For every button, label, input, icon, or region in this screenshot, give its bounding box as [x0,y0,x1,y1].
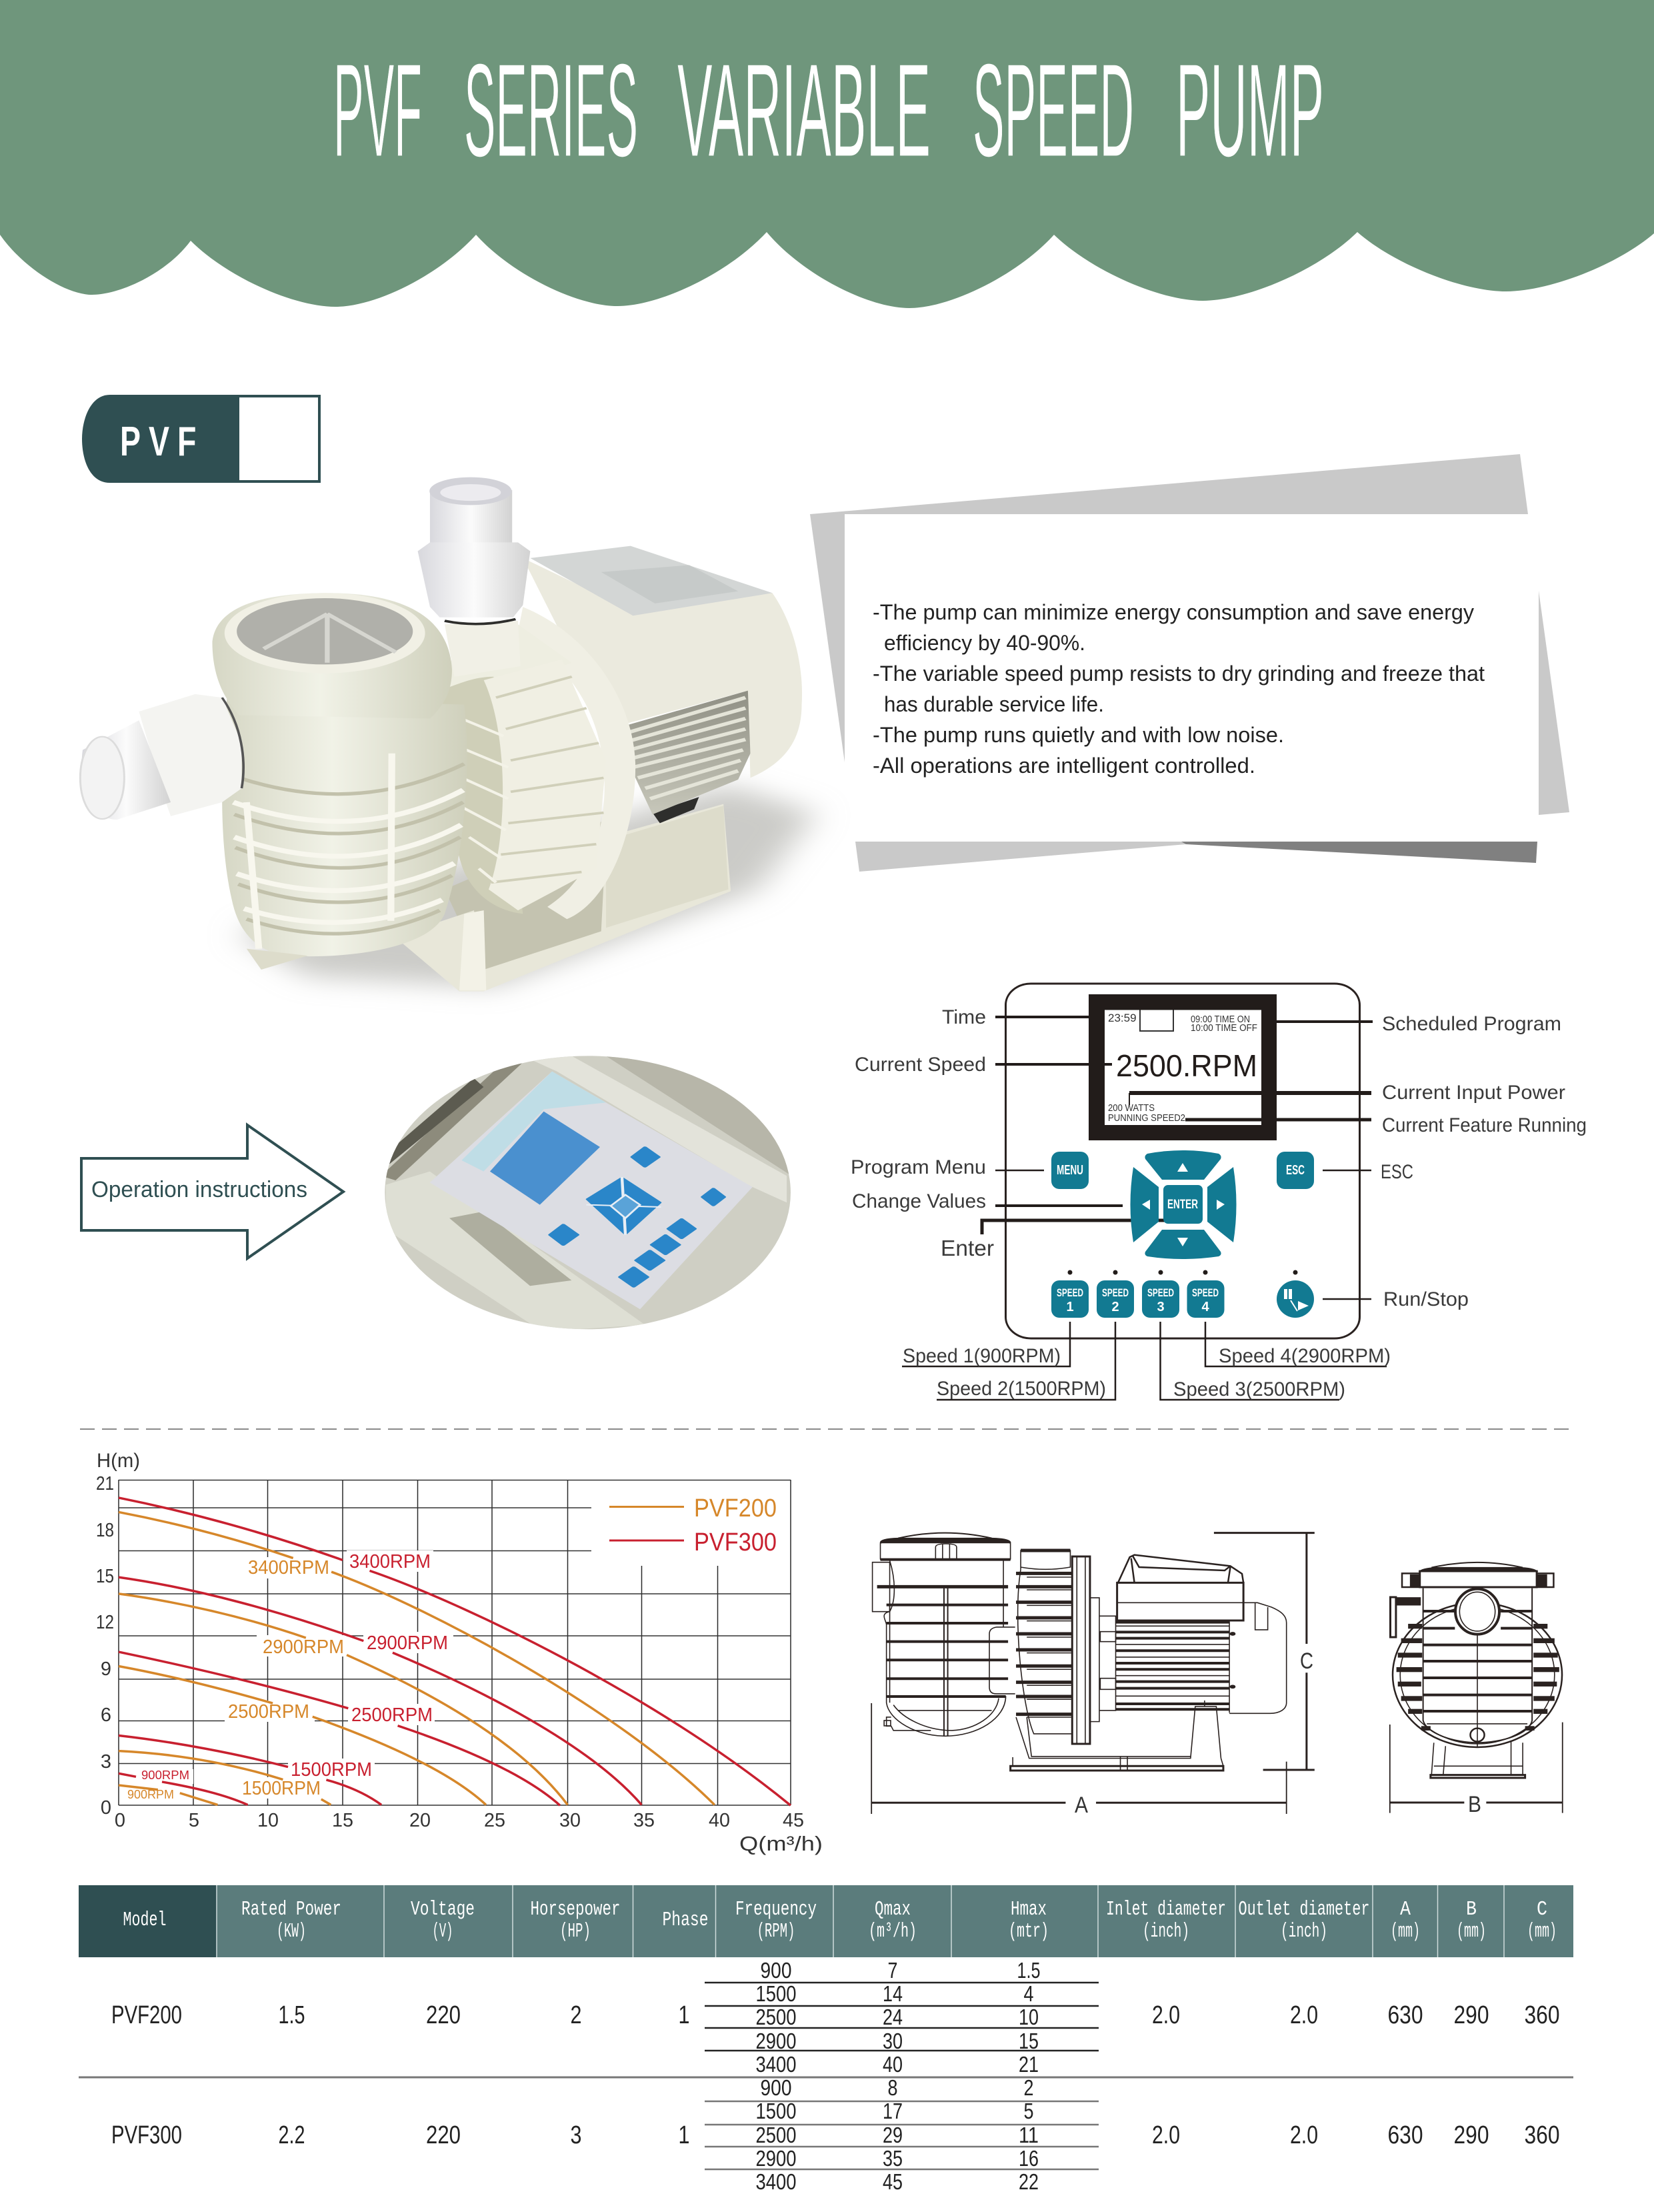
chart axes: 20 [409,1810,431,1831]
row: PVF300: 900 [760,2075,792,2100]
chart axes: 30 [559,1810,581,1831]
table header: Outlet diameter [1239,1898,1369,1921]
row: PVF300: 630 [1388,2121,1423,2149]
row: PVF300: 2500 [756,2123,796,2147]
curve labels: 2500RPM [351,1705,433,1726]
table header: Horsepower [531,1898,620,1921]
row: PVF200: 40 [883,2052,903,2077]
chart axes: 5 [189,1810,199,1831]
dimension labels: A [1075,1793,1088,1818]
callout labels: ESC [1381,1161,1413,1183]
row: PVF200: 7 [888,1958,897,1983]
performance chart: 1500RPM [242,1778,321,1799]
dimension labels: C [1300,1648,1313,1674]
operation instructions arrow: Operation instructions [91,1177,307,1202]
callout labels: Current Input Power [1382,1082,1565,1104]
dimension labels: B [1468,1792,1481,1817]
table header: C [1537,1898,1547,1921]
row: PVF300: 2.0 [1152,2121,1180,2149]
control panel photo [381,1054,797,1332]
row: PVF200: 630 [1388,2001,1423,2029]
curve labels: 3400RPM [349,1551,431,1572]
panel: feature description: efficiency by 40-90%. [884,631,1085,655]
speed buttons: 4 [1201,1300,1209,1314]
speed buttons: 2 [1111,1300,1119,1314]
callout labels: Current Speed [855,1054,986,1076]
row: PVF200: 14 [883,1981,903,2006]
chart axes: 21 [96,1473,114,1494]
row: PVF200: 220 [426,2001,461,2029]
LCD display: 09:00 TIME ON [1191,1014,1250,1025]
chart axes: 0 [101,1797,111,1819]
row: PVF300 [111,2075,1560,2194]
performance curves [119,1498,791,1805]
table header [79,1885,1573,1957]
control panel diagram [851,984,1587,1400]
chart axes: 40 [709,1810,730,1831]
callout labels: Change Values [852,1190,986,1212]
panel: feature description: has durable service life. [884,692,1104,716]
table header: Model [123,1909,167,1932]
title: SPEED [973,37,1134,185]
curve labels: 1500RPM [291,1759,372,1781]
row: PVF200: 2.0 [1290,2001,1318,2029]
pump photo illustration [80,477,817,991]
row: PVF300: 360 [1524,2121,1560,2149]
panel: feature description: -The pump runs quietly and with low noise. [873,723,1284,747]
speed buttons: SPEED [1192,1286,1219,1299]
menu and esc buttons [1051,1152,1314,1189]
row: PVF200: 4 [1024,1981,1033,2006]
speed buttons: 3 [1157,1300,1165,1314]
row: PVF300: 3 [571,2121,581,2149]
chart axes: 15 [96,1566,114,1587]
row: PVF200: 2 [571,2001,581,2029]
row: PVF300: 5 [1024,2099,1033,2123]
run stop button [1277,1280,1314,1318]
row: PVF200: 21 [1019,2052,1039,2077]
table header: Rated Power [241,1898,341,1921]
callout lines [902,1017,1387,1400]
performance chart: 2900RPM [263,1636,344,1658]
table row lines [79,1983,1573,2169]
panel: feature description: -The variable speed pump resists to dry grinding and freeze that [873,662,1485,686]
row: PVF300: 3400 [756,2169,796,2194]
table header: Frequency [735,1898,817,1921]
chart grid [119,1480,791,1805]
callout labels: Scheduled Program [1382,1013,1561,1035]
title [333,37,1324,185]
row: PVF200: 30 [883,2029,903,2053]
table header: Qmax [875,1898,911,1921]
table header: (V) [432,1920,453,1943]
speed buttons: SPEED [1147,1286,1174,1299]
row: PVF300: 220 [426,2121,461,2149]
callout labels: Program Menu [851,1156,986,1178]
LCD display: 23:59 [1108,1012,1137,1024]
panel: feature description: -All operations are intelligent controlled. [873,754,1255,778]
menu and esc buttons: ESC [1286,1163,1305,1178]
row: PVF200: 2.0 [1152,2001,1180,2029]
row: PVF300: 35 [883,2146,903,2171]
table header: (KW) [277,1920,306,1943]
table header: B [1466,1898,1477,1921]
callout labels: Speed 1(900RPM) [903,1345,1061,1367]
row: PVF300: 8 [888,2075,897,2100]
table header: Hmax [1011,1898,1047,1921]
row: PVF200: 900 [760,1958,792,1983]
performance chart: 3400RPM [248,1557,329,1578]
row: PVF200: 3400 [756,2052,796,2077]
curve labels: 2900RPM [367,1632,448,1654]
row: PVF300: 2.0 [1290,2121,1318,2149]
row: PVF300: 16 [1019,2146,1039,2171]
table header: Inlet diameter [1106,1898,1226,1921]
row: PVF300: 1 [679,2121,689,2149]
table header: A [1400,1898,1411,1921]
chart legend: PVF200 [694,1494,777,1522]
callout labels: Speed 2(1500RPM) [937,1378,1106,1400]
chart axes: Q(m³/h) [739,1832,823,1855]
table header: (mm) [1527,1920,1557,1943]
table header: (mm) [1391,1920,1420,1943]
row: PVF200: 2500 [756,2005,796,2029]
side view dimension drawing [871,1533,1315,1814]
table header: (RPM) [757,1920,795,1943]
operation instructions arrow [81,1125,343,1258]
title: SERIES [464,37,638,185]
table header: (m³/h) [869,1920,917,1943]
LCD display: 200 WATTS [1108,1102,1155,1114]
direction pad [1131,1150,1236,1259]
row: PVF200: 1.5 [1017,1958,1040,1983]
row: PVF300: 11 [1019,2123,1039,2147]
chart axes: 25 [484,1810,505,1831]
row: PVF200: 360 [1524,2001,1560,2029]
row: PVF200: 10 [1019,2005,1039,2029]
speed buttons: 1 [1066,1300,1074,1314]
row: PVF300: 2.2 [279,2121,305,2149]
row: PVF200: 15 [1019,2029,1039,2053]
menu and esc buttons: MENU [1057,1163,1083,1178]
chart axes: 35 [633,1810,655,1831]
chart legend [609,1494,777,1556]
title: VARIABLE [677,37,931,185]
callout labels: Current Feature Running [1382,1114,1587,1136]
dashed separator [80,1428,1569,1430]
row: PVF300: PVF300 [111,2121,182,2149]
panel: feature description [810,454,1569,872]
row: PVF200: 2900 [756,2029,796,2053]
performance chart [96,1450,823,1855]
row: PVF200: 1500 [756,1981,796,2006]
model badge [82,395,319,483]
performance chart: 2500RPM [228,1701,309,1723]
chart axes [96,1450,823,1855]
row: PVF200: 24 [883,2005,903,2029]
row: PVF300: 1500 [756,2099,796,2123]
specification table [79,1885,1573,2194]
panel: feature description: -The pump can minimize energy consumption and save energy [873,600,1474,624]
row: PVF300: 290 [1453,2121,1489,2149]
table header: Phase [663,1909,708,1932]
chart axes: 10 [257,1810,279,1831]
chart axes: 0 [115,1810,125,1831]
callout labels: Speed 4(2900RPM) [1219,1345,1391,1367]
row: PVF200: 290 [1453,2001,1489,2029]
dimension labels [1075,1648,1481,1818]
chart axes: 6 [101,1705,111,1726]
row: PVF200: PVF200 [111,2001,182,2029]
row: PVF200 [111,1958,1560,2077]
callout labels: Speed 3(2500RPM) [1173,1378,1345,1400]
row: PVF300: 45 [883,2169,903,2194]
row: PVF300: 2 [1024,2075,1033,2100]
row: PVF300: 2900 [756,2146,796,2171]
row: PVF300: 29 [883,2123,903,2147]
model badge: PVF [120,417,204,465]
curve labels: 900RPM [141,1769,189,1782]
chart axes: 3 [101,1751,111,1773]
chart axes: 9 [101,1658,111,1680]
chart legend: PVF300 [694,1528,777,1556]
table header: Voltage [411,1898,475,1921]
table header: (mtr) [1009,1920,1049,1943]
callout labels: Enter [941,1236,994,1260]
chart axes: 12 [96,1612,114,1633]
callout labels: Time [942,1006,986,1028]
chart axes: 18 [96,1520,114,1541]
speed buttons [1051,1270,1297,1318]
curve labels [141,1551,448,1782]
table header: (inch) [1143,1920,1189,1943]
header banner [0,0,1654,308]
chart axes: H(m) [97,1450,140,1472]
row: PVF200: 1 [679,2001,689,2029]
chart axes: 45 [783,1810,804,1831]
LCD display [1089,994,1277,1140]
performance chart: 900RPM [127,1788,174,1801]
row: PVF300: 17 [883,2099,903,2123]
callout labels [851,1006,1587,1400]
speed buttons: SPEED [1102,1286,1129,1299]
table header: (mm) [1457,1920,1486,1943]
chart label backgrounds [124,1550,453,1803]
LCD display: PUNNING SPEED2 [1108,1112,1185,1124]
callout labels: Run/Stop [1383,1288,1469,1310]
LCD display: 10:00 TIME OFF [1191,1022,1257,1034]
speed buttons: SPEED [1057,1286,1083,1299]
direction pad: ENTER [1167,1198,1198,1212]
text: PUMP [1176,37,1324,185]
title: PVF [333,37,422,185]
table header: (HP) [560,1920,591,1943]
front view dimension drawing [1390,1562,1563,1813]
row: PVF200: 1.5 [279,2001,305,2029]
row: PVF300: 22 [1019,2169,1039,2194]
table header: (inch) [1281,1920,1327,1943]
LCD display: 2500.RPM [1116,1048,1257,1083]
chart axes: 15 [332,1810,353,1831]
